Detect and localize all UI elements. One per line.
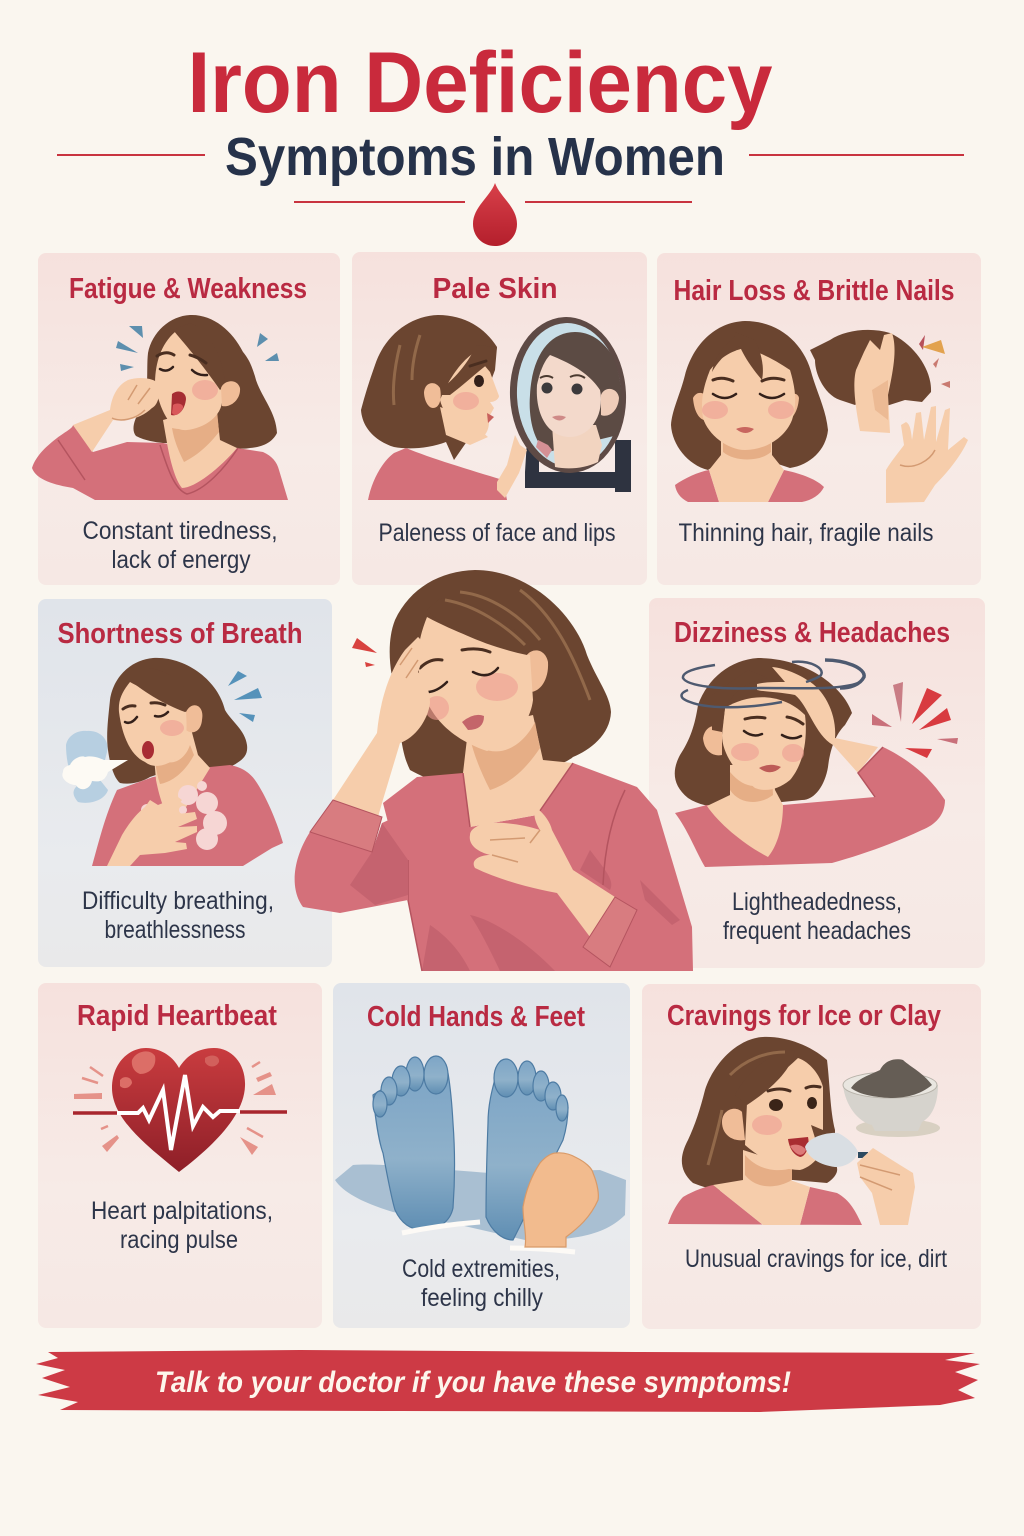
icon: ice on spoon xyxy=(805,1133,858,1167)
icon: tired marks xyxy=(116,326,279,371)
icon: heart with pulse line xyxy=(73,1048,287,1172)
panel: hair loss and brittle nails xyxy=(657,253,981,585)
heading: Fatigue & Weakness xyxy=(69,273,307,305)
body text: Thinning hair, fragile nails xyxy=(678,519,934,547)
icon: pain marks xyxy=(352,638,377,667)
left foot xyxy=(373,1056,454,1230)
panel: dizziness and headaches xyxy=(649,598,985,968)
hand on chest xyxy=(470,808,615,937)
body text: Paleness of face and lips xyxy=(378,519,616,547)
hair xyxy=(390,570,611,781)
icon: hand on chest xyxy=(107,797,197,866)
icon: marks xyxy=(228,671,262,722)
left cuff xyxy=(310,800,382,852)
panel: rapid heartbeat xyxy=(38,983,322,1328)
panel: cravings for ice or clay xyxy=(642,984,981,1329)
sleeve xyxy=(295,815,408,913)
neck and chest xyxy=(463,715,573,827)
icon: blood drop xyxy=(473,183,517,246)
face xyxy=(418,617,533,751)
icon: open hand with nails xyxy=(886,406,968,503)
hand on forehead xyxy=(757,667,878,773)
heading: Rapid Heartbeat xyxy=(77,1000,277,1032)
illustration: central woman with headache xyxy=(295,570,693,971)
body text: Constant tiredness, xyxy=(82,517,278,545)
body text: Cold extremities, xyxy=(402,1255,560,1283)
shadow under feet xyxy=(335,1165,626,1240)
subheading: Symptoms in Women xyxy=(225,127,725,187)
icon: mirror xyxy=(497,314,631,498)
callout banner xyxy=(36,1350,980,1412)
right cuff xyxy=(583,897,637,967)
illustration: dizzy woman xyxy=(675,658,958,867)
panel: fatigue and weakness: lack of energy xyxy=(112,546,251,574)
icon: bowl of clay xyxy=(843,1059,940,1137)
right foot xyxy=(486,1059,568,1240)
heading: Hair Loss & Brittle Nails xyxy=(674,275,954,307)
sweater xyxy=(383,763,693,971)
heading: Cold Hands & Feet xyxy=(367,1001,585,1033)
body text: Heart palpitations, xyxy=(91,1197,273,1225)
illustration: yawning woman xyxy=(32,315,288,500)
icon: pain bursts xyxy=(893,682,903,722)
panel: dizziness and headaches: frequent headaches xyxy=(723,917,911,945)
heading: Pale Skin xyxy=(432,273,558,305)
icon: marks xyxy=(919,335,925,350)
panel: pale skin xyxy=(352,252,647,585)
illustration: breathless woman xyxy=(62,658,283,866)
icon: lungs puffs xyxy=(141,781,227,850)
title xyxy=(57,35,964,246)
icon: hand on mirror xyxy=(497,435,527,498)
icon: hand holding spoon xyxy=(857,1148,915,1225)
panel: shortness of breath: breathlessness xyxy=(104,916,246,944)
panel: cold hands and feet xyxy=(333,983,630,1328)
body text: Lightheadedness, xyxy=(732,888,902,916)
icon: hair clump in hand xyxy=(810,330,931,408)
callout text: Talk to your doctor if you have these symptoms! xyxy=(155,1366,791,1399)
heading: Shortness of Breath xyxy=(58,618,302,650)
heading: Cravings for Ice or Clay xyxy=(667,1000,941,1032)
heading: Dizziness & Headaches xyxy=(674,617,950,649)
ear xyxy=(527,650,548,692)
panel: shortness of breath xyxy=(38,599,332,967)
illustration: woman with mirror xyxy=(361,314,631,500)
body text: Unusual cravings for ice, dirt xyxy=(685,1245,947,1273)
panel: rapid heartbeat: racing pulse xyxy=(120,1226,238,1254)
icon: dizziness swirl xyxy=(682,660,864,707)
illustration: cold feet xyxy=(335,1056,626,1252)
icon: breath cloud xyxy=(66,731,108,803)
main heading: Iron Deficiency xyxy=(188,35,773,131)
illustration: woman with hair and hand xyxy=(671,321,968,503)
icon: hand touching foot xyxy=(523,1153,598,1247)
illustration: woman eating ice xyxy=(668,1037,940,1225)
raised arm and hand xyxy=(333,637,430,817)
panel: fatigue and weakness xyxy=(32,253,340,585)
panel: cold hands and feet: feeling chilly xyxy=(421,1284,543,1312)
body text: Difficulty breathing, xyxy=(82,887,274,915)
